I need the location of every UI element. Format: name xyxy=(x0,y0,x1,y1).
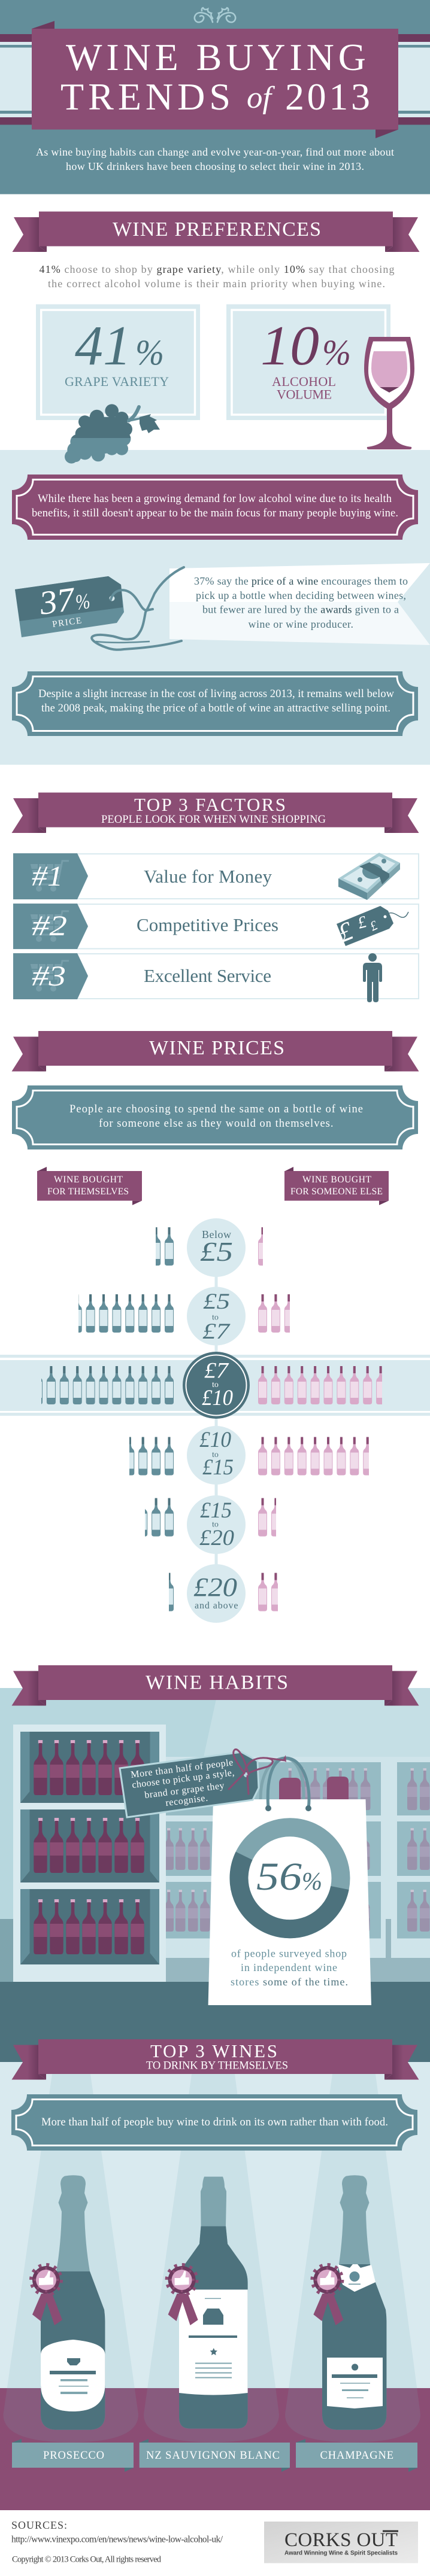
panel: factor 2 competitive prices: Competitive Prices xyxy=(137,914,278,935)
intro text: As wine buying habits can change and evolve year-on-year, find out more about xyxy=(36,146,394,158)
callout: low alcohol demand: benefits, it still doesn't appear to be the main focus for many people buying wine. xyxy=(32,507,398,519)
callout: drink on its own xyxy=(11,2094,417,2151)
icon: grapes xyxy=(65,404,160,464)
chart row: £7 to £10 xyxy=(34,1352,385,1419)
text block: sources xyxy=(11,2519,223,2565)
panel: factor 3 excellent service xyxy=(13,953,419,1002)
callout: spend the same xyxy=(12,1085,418,1149)
chart row: £20 and above: and above xyxy=(195,1601,238,1611)
heading ribbon: wine habits xyxy=(12,1665,419,1705)
heading ribbon: top 3 wines: TOP 3 WINES xyxy=(150,2040,277,2061)
chart row: £10 to £15: to xyxy=(212,1450,219,1459)
chart row: £10 to £15: £15 xyxy=(202,1455,234,1480)
icon: pound price tag: £ xyxy=(368,917,380,934)
bottle: nz sauvignon blanc xyxy=(167,2177,248,2429)
title: TRENDS xyxy=(60,75,231,118)
callout: cost of living: Despite a slight increase in the cost of living across 2013, it remains well below xyxy=(38,688,395,700)
icon: bow xyxy=(229,1750,286,1794)
text: independent stores xyxy=(231,1947,348,1988)
heading ribbon: top 3 factors: PEOPLE LOOK FOR WHEN WINE SHOPPING xyxy=(101,814,326,826)
chart row: £20 and above xyxy=(165,1564,280,1623)
panel: factor 1 value for money: Value for Money xyxy=(144,866,272,887)
icon: pound price tag: £ xyxy=(334,916,358,948)
label: prosecco: PROSECCO xyxy=(43,2450,104,2462)
callout: low alcohol demand: While there has been a growing demand for low alcohol wine due to its health xyxy=(38,493,392,505)
icon: rosette xyxy=(312,2265,343,2325)
callout: spend the same: People are choosing to spend the same on a bottle of wine xyxy=(69,1103,363,1115)
heading ribbon: top 3 wines xyxy=(12,2039,419,2080)
panel: wine habits shop scene xyxy=(0,1688,430,2062)
icon: rosette xyxy=(167,2265,198,2325)
label: nz sauvignon blanc: NZ SAUVIGNON BLANC xyxy=(146,2450,280,2462)
donut chart: 56% xyxy=(239,1827,341,1929)
callout: spend the same: for someone else as they would on themselves. xyxy=(99,1118,333,1130)
chart row: £15 to £20: to xyxy=(212,1520,219,1529)
callout: cost of living: the 2008 peak, making the price of a bottle of wine an attractive selling point. xyxy=(41,702,390,714)
chart row: £7 to £10: £7 xyxy=(204,1358,229,1383)
panel: 41% grape variety: 41 xyxy=(75,315,131,377)
chart row: £5 to £7: £7 xyxy=(202,1319,231,1344)
ribbon: bought for someone else: FOR SOMEONE ELSE xyxy=(290,1187,383,1197)
heading ribbon: wine preferences: WINE PREFERENCES xyxy=(113,218,321,241)
label: prosecco xyxy=(12,2439,134,2472)
text block: preferences summary xyxy=(40,263,394,290)
icon: person xyxy=(363,953,382,1002)
title: WINE BUYING xyxy=(66,36,366,78)
text block: sources: Copyright © 2013 Corks Out, All rights reserved xyxy=(12,2555,162,2565)
icon: rosette xyxy=(31,2265,62,2325)
intro text: how UK drinkers have been choosing to select their wine in 2013. xyxy=(66,160,364,172)
panel: 10% alcohol volume: % xyxy=(322,333,351,372)
text: independent stores: in independent wine xyxy=(241,1961,337,1973)
panel: price banner: pick up a bottle when deciding between wines, xyxy=(196,589,406,601)
label: champagne: CHAMPAGNE xyxy=(320,2450,393,2462)
text block: preferences summary: 41% choose to shop by grape variety, while only 10% say that choosing xyxy=(40,263,394,275)
callout: gift tag: brand or grape they xyxy=(144,1781,225,1801)
chart row: £5 to £7 xyxy=(73,1287,293,1345)
panel: 10% alcohol volume: ALCOHOL xyxy=(272,374,336,389)
panel: 41% grape variety: % xyxy=(135,333,164,372)
icon: ornament flourish xyxy=(195,8,235,22)
callout: drink on its own: More than half of people buy wine to drink on its own rather than with food. xyxy=(41,2116,388,2128)
panel: factor 3 excellent service: Excellent Service xyxy=(144,965,271,986)
icon: 37% price tag: PRICE xyxy=(52,616,82,629)
chart row: £15 to £20 xyxy=(138,1495,280,1554)
text: independent stores: stores some of the time. xyxy=(231,1976,348,1988)
heading ribbon: wine preferences xyxy=(12,212,419,252)
icon: banknotes xyxy=(338,853,400,900)
background shelves xyxy=(164,1757,430,1958)
panel: pale band behind preferences callouts xyxy=(0,450,430,765)
panel: 10% alcohol volume: 10 xyxy=(261,315,319,377)
panel: price banner: wine or wine producer. xyxy=(248,618,353,630)
heading ribbon: wine habits: WINE HABITS xyxy=(146,1672,288,1694)
chart row: £15 to £20: £20 xyxy=(199,1526,235,1550)
panel: 10% alcohol volume xyxy=(226,304,390,420)
chart row: below £5: Below xyxy=(202,1228,231,1240)
icon: shopping bag xyxy=(208,1758,371,2005)
logo: corks out xyxy=(264,2522,418,2563)
callout: gift tag xyxy=(120,1750,286,1817)
chart row: below £5 xyxy=(152,1218,267,1277)
callout: cost of living xyxy=(12,671,418,736)
panel: top wines spotlight stage xyxy=(0,2062,430,2510)
chart row: £7 to £10: £10 xyxy=(202,1386,233,1410)
panel: factor 1 value for money xyxy=(13,853,419,900)
highlight band for £7 to £10 xyxy=(0,1355,430,1416)
chart row: £7 to £10: to xyxy=(212,1380,219,1389)
callout: gift tag: choose to pick up a style, xyxy=(131,1768,235,1790)
logo: corks out: CORKS OUT xyxy=(284,2529,398,2551)
panel: factor 1 value for money: #1 xyxy=(32,860,63,892)
chart row: £5 to £7: £5 xyxy=(203,1289,230,1314)
callout: gift tag: More than half of people xyxy=(130,1757,234,1780)
panel: factor 3 excellent service: #3 xyxy=(32,960,66,992)
ribbon: bought for someone else: WINE BOUGHT xyxy=(302,1175,372,1185)
panel: price banner xyxy=(169,563,430,645)
chart row: £10 to £15: £10 xyxy=(199,1428,231,1452)
ribbon: bought for someone else xyxy=(284,1167,389,1205)
label: nz sauvignon blanc xyxy=(140,2439,290,2472)
title: 2013 xyxy=(285,75,370,118)
panel: 10% alcohol volume: VOLUME xyxy=(277,387,332,402)
heading ribbon: top 3 factors xyxy=(12,792,419,833)
icon: 37% price tag xyxy=(15,567,184,650)
foreground wine shelf xyxy=(13,1725,166,1982)
icon: 37% price tag: 37 xyxy=(37,580,78,622)
callout: gift tag: recognise. xyxy=(165,1793,208,1808)
chart row: £10 to £15 xyxy=(125,1426,372,1485)
heading ribbon: top 3 factors: TOP 3 FACTORS xyxy=(134,794,286,815)
icon: wine glass xyxy=(364,337,414,449)
panel: header xyxy=(0,0,430,194)
text: independent stores: of people surveyed shop xyxy=(231,1947,347,1959)
icon: 37% price tag: % xyxy=(74,589,92,615)
panel: price banner: but fewer are lured by the awards given to a xyxy=(202,603,399,615)
title ribbon xyxy=(32,21,398,138)
ribbon: bought for themselves: FOR THEMSELVES xyxy=(47,1187,129,1197)
icon: pound price tag: £ xyxy=(356,913,369,933)
logo: corks out: Award Winning Wine & Spirit Specialists xyxy=(284,2550,398,2556)
chart row: below £5: £5 xyxy=(200,1236,233,1267)
panel: factor 2 competitive prices xyxy=(13,904,419,949)
bottle: prosecco xyxy=(31,2175,105,2430)
chart row: £20 and above: £20 xyxy=(193,1573,237,1602)
panel: factor 2 competitive prices: #2 xyxy=(32,910,67,942)
donut chart: 56%: 56 xyxy=(256,1855,302,1899)
intro text xyxy=(36,146,394,172)
chart row: £5 to £7: to xyxy=(212,1313,219,1322)
text block: preferences summary: the correct alcohol volume is their main priority when buying wine. xyxy=(48,278,385,290)
donut chart: 56%: % xyxy=(302,1868,322,1896)
callout: low alcohol demand xyxy=(12,475,418,540)
panel: price banner: 37% say the price of a wine encourages them to xyxy=(194,575,408,587)
panel: 41% grape variety xyxy=(36,304,200,420)
title xyxy=(60,36,370,118)
chart: price spine xyxy=(0,1248,430,1593)
heading ribbon: wine prices xyxy=(12,1031,419,1071)
heading ribbon: top 3 wines: TO DRINK BY THEMSELVES xyxy=(146,2060,288,2072)
ribbon: bought for themselves: WINE BOUGHT xyxy=(54,1175,123,1185)
title: of xyxy=(247,81,275,115)
ribbon: bought for themselves xyxy=(37,1167,142,1205)
panel: 41% grape variety: GRAPE VARIETY xyxy=(65,374,169,389)
text block: sources: SOURCES: xyxy=(11,2519,67,2531)
label: champagne xyxy=(296,2439,417,2472)
icon: pound price tag xyxy=(334,906,408,948)
heading ribbon: wine prices: WINE PRICES xyxy=(149,1037,284,1059)
text block: sources: http://www.vinexpo.com/en/news/news/wine-low-alcohol-uk/ xyxy=(11,2535,223,2544)
chart row: £15 to £20: £15 xyxy=(200,1498,232,1523)
bottle: champagne xyxy=(312,2175,386,2430)
